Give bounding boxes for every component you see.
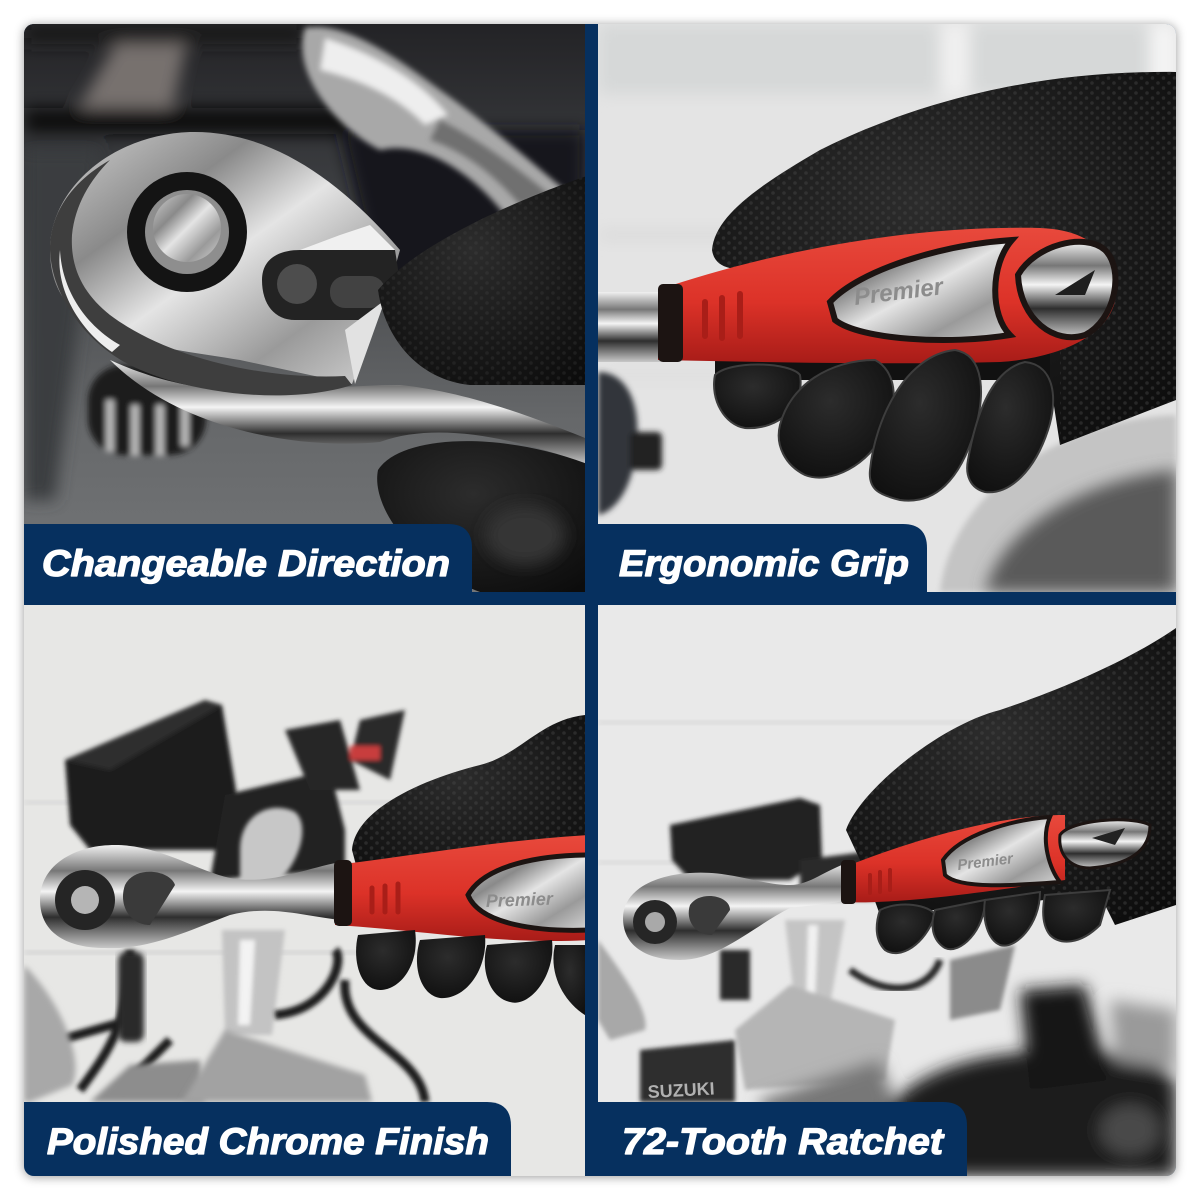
label: polished chrome finish [24, 1102, 511, 1176]
label: ergonomic grip: Ergonomic Grip [619, 543, 909, 584]
chrome handlebar [222, 808, 302, 1035]
chrome badge [468, 855, 590, 930]
ratchet wrench [623, 862, 850, 960]
glove upper hand [712, 72, 1176, 445]
center bolt [127, 172, 247, 292]
panel: polished chrome finish photo [24, 605, 590, 1176]
label: changeable direction: Changeable Direction [42, 543, 450, 584]
chrome tip [1018, 242, 1115, 337]
glove hand [378, 175, 590, 385]
red handle [658, 228, 1116, 363]
ratchet head [50, 132, 400, 384]
label: 72-tooth ratchet: 72-Tooth Ratchet [622, 1121, 945, 1162]
upper glove [352, 715, 585, 862]
panel: ergonomic grip photo [598, 24, 1176, 592]
panel: polished chrome finish photo: Premier [485, 889, 554, 911]
ratchet shaft [110, 360, 590, 465]
blurred foreground objects [760, 985, 1176, 1176]
red handle [842, 815, 1065, 902]
label: changeable direction [24, 524, 472, 592]
label: 72-tooth ratchet [585, 1102, 967, 1176]
grip ridges [705, 294, 740, 338]
chrome shaft [598, 292, 664, 362]
panel: ergonomic grip photo: Premier [852, 273, 946, 311]
chrome tip [1060, 820, 1150, 868]
master cylinder and bike parts [598, 798, 1015, 1102]
chrome badge [830, 240, 1012, 340]
label: polished chrome finish: Polished Chrome Finish [47, 1121, 489, 1162]
master cylinder [65, 700, 405, 880]
chrome badge [943, 817, 1060, 885]
socket [88, 365, 206, 456]
panel: 72-tooth ratchet photo [598, 605, 1176, 1176]
fingers [714, 350, 1053, 501]
shadow under handle [715, 361, 1013, 380]
upper glove [846, 628, 1176, 925]
blurred mirror and dome [598, 372, 1176, 592]
red handle [335, 835, 590, 941]
panel: changeable direction photo [24, 24, 590, 592]
suzuki label: SUZUKI [647, 1079, 715, 1102]
fingers [877, 890, 1110, 953]
direction switch [262, 250, 400, 320]
fingers [356, 930, 590, 1018]
blurred chrome bar [302, 27, 565, 215]
ratchet wrench [40, 845, 340, 948]
panel: 72-tooth ratchet photo: Premier [956, 850, 1015, 874]
cables [60, 950, 425, 1102]
label: ergonomic grip [585, 524, 927, 605]
